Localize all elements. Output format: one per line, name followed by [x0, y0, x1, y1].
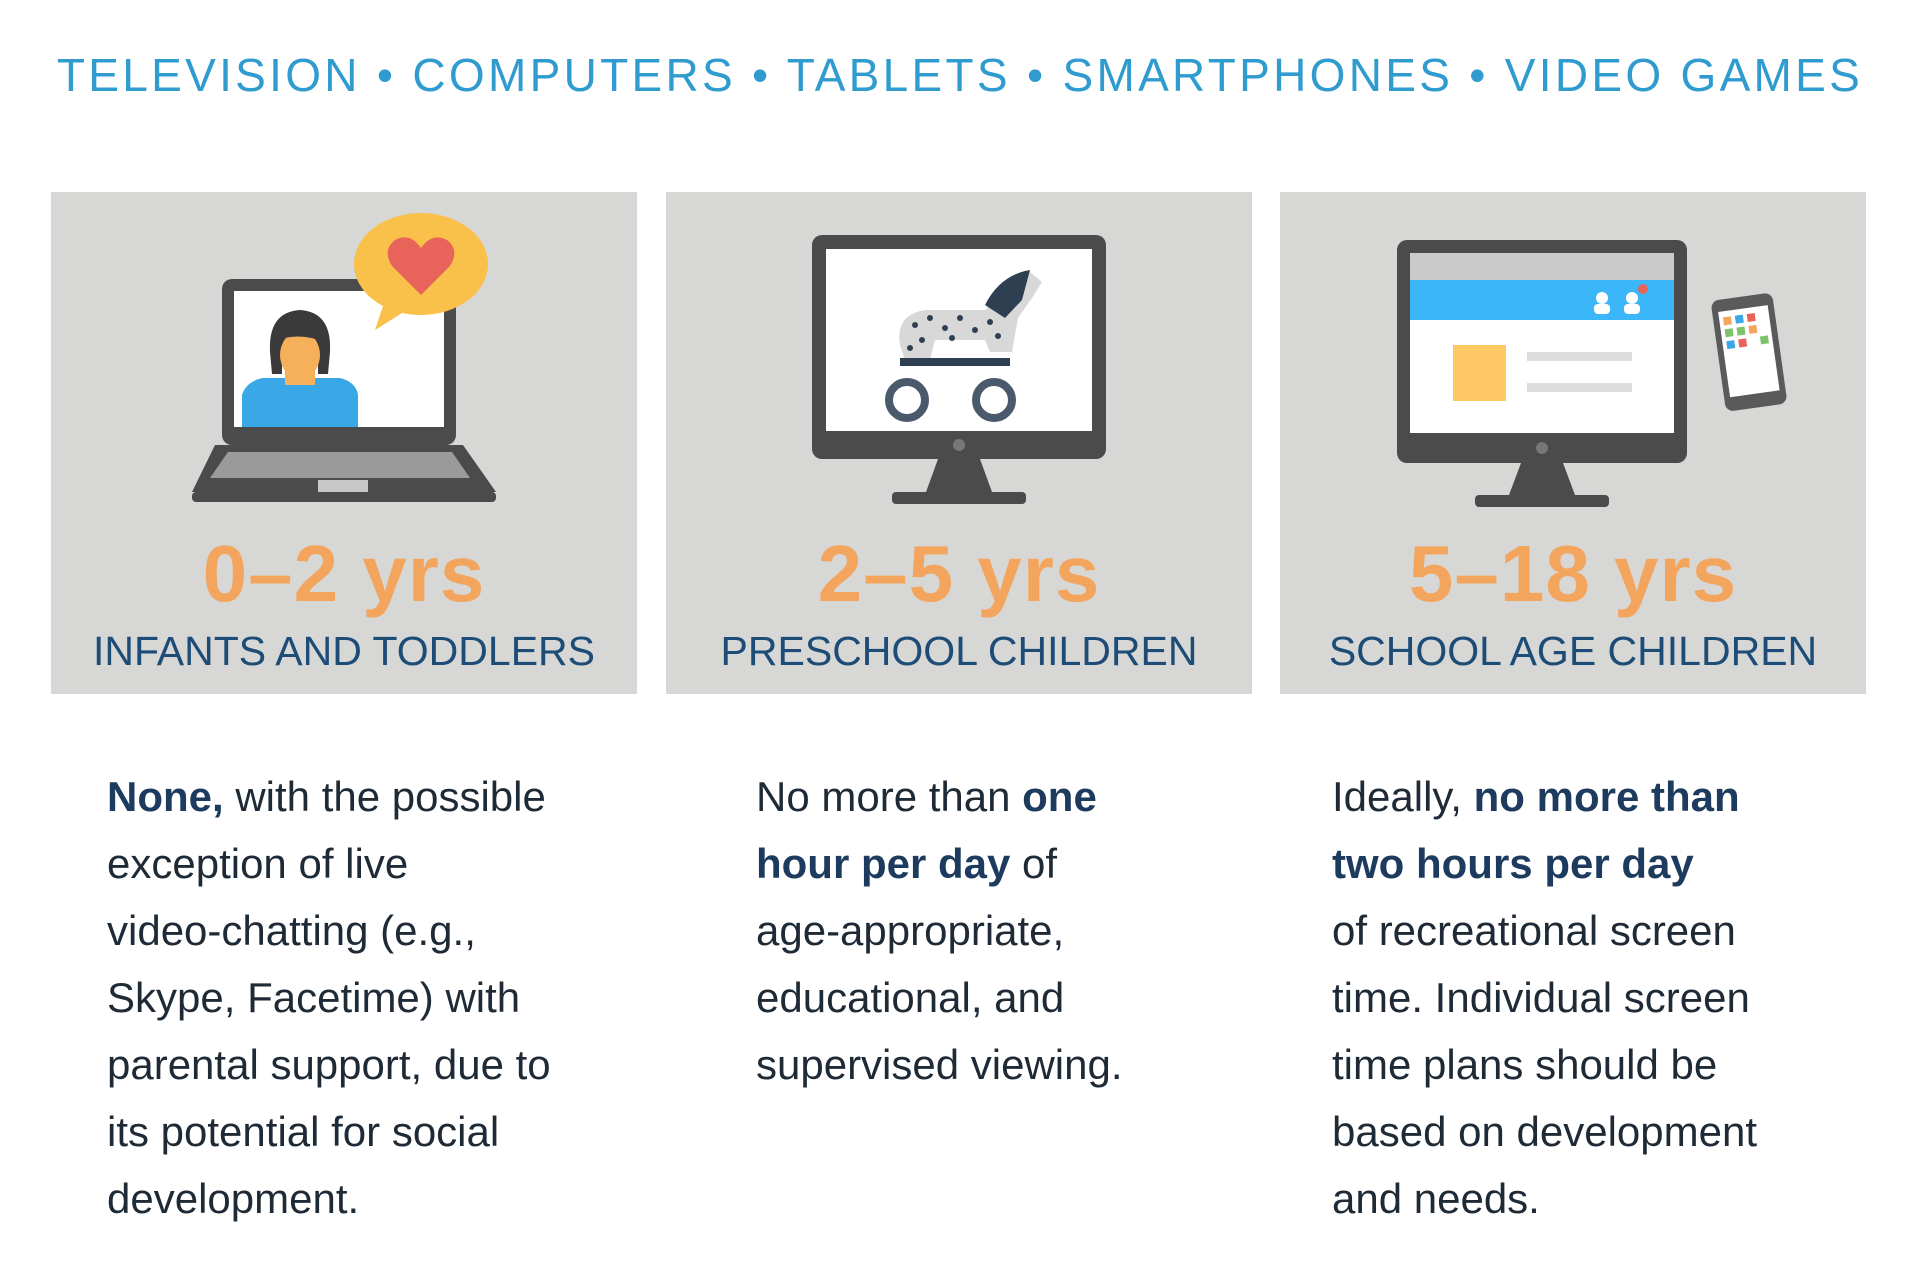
- text: infants guideline: Skype, Facetime) with: [107, 974, 520, 1021]
- text: preschool guideline: supervised viewing.: [756, 1041, 1123, 1088]
- age heading: 0-2: [93, 529, 595, 674]
- age heading: 5-18: [1329, 529, 1817, 674]
- panel: infants: [51, 192, 637, 694]
- panel: school age: [1280, 192, 1866, 694]
- age heading: 2-5: [721, 529, 1197, 674]
- age heading: 2-5: 2–5 yrs: [818, 529, 1100, 618]
- age heading: 5-18: 5–18 yrs: [1409, 529, 1737, 618]
- text: school age guideline: time plans should be: [1332, 1041, 1717, 1088]
- text: infants guideline: development.: [107, 1175, 359, 1222]
- age heading: 5-18: SCHOOL AGE CHILDREN: [1329, 628, 1817, 674]
- icons: [192, 213, 1786, 507]
- text: infants guideline: its potential for social: [107, 1108, 499, 1155]
- age heading: 2-5: PRESCHOOL CHILDREN: [721, 628, 1197, 674]
- text: infants guideline: parental support, due to: [107, 1041, 551, 1088]
- text: preschool guideline: No more than one: [756, 773, 1097, 820]
- text: infants guideline: video-chatting (e.g.,: [107, 907, 476, 954]
- text: infants guideline: [107, 773, 551, 1222]
- text: preschool guideline: age-appropriate,: [756, 907, 1064, 954]
- age heading: 0-2: INFANTS AND TODDLERS: [93, 628, 595, 674]
- text: preschool guideline: [756, 773, 1123, 1088]
- title: TELEVISION • COMPUTERS • TABLETS • SMARTPHONES • VIDEO GAMES: [57, 49, 1863, 101]
- text: school age guideline: time. Individual screen: [1332, 974, 1750, 1021]
- text: school age guideline: based on development: [1332, 1108, 1757, 1155]
- text: school age guideline: two hours per day: [1332, 840, 1694, 887]
- icon: monitor with toy horse: [812, 235, 1106, 504]
- text: preschool guideline: educational, and: [756, 974, 1064, 1021]
- text: preschool guideline: hour per day of: [756, 840, 1057, 887]
- text: school age guideline: [1332, 773, 1757, 1222]
- icon: laptop video chat: [192, 213, 496, 502]
- icon: monitor with web page and smartphone: [1397, 240, 1788, 507]
- age heading: 0-2: 0–2 yrs: [203, 529, 485, 618]
- text: infants guideline: exception of live: [107, 840, 408, 887]
- text: school age guideline: of recreational screen: [1332, 907, 1736, 954]
- panel: preschool: [666, 192, 1252, 694]
- text: infants guideline: None, with the possible: [107, 773, 546, 820]
- text: school age guideline: and needs.: [1332, 1175, 1540, 1222]
- text: school age guideline: Ideally, no more than: [1332, 773, 1740, 820]
